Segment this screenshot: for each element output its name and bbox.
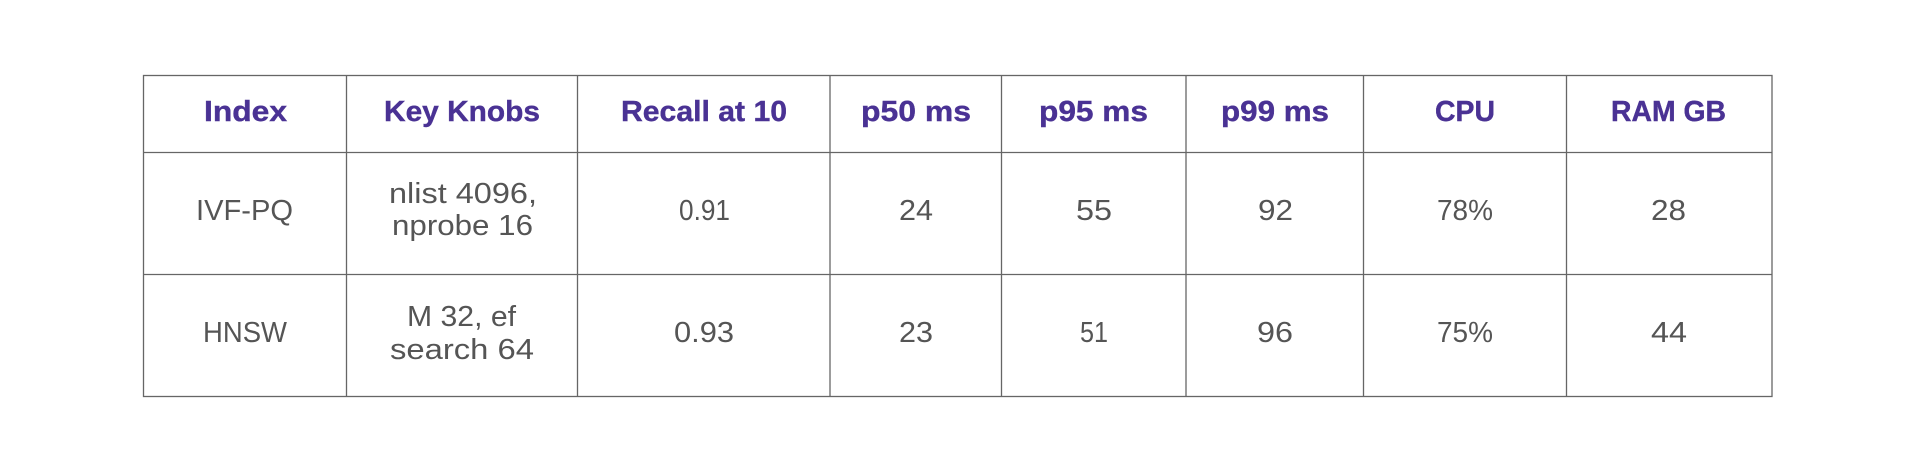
key knobs: nprobe 16 (392, 210, 533, 242)
header: Index: Index (204, 96, 287, 128)
header row (204, 96, 1726, 128)
key knobs (389, 178, 537, 242)
table grid (144, 76, 1772, 396)
key knobs: nlist 4096, (389, 178, 537, 210)
row: HNSW (203, 301, 1687, 366)
p95: 51 (1080, 317, 1108, 349)
row: IVF-PQ (196, 178, 1686, 242)
header: p95 ms: p95 ms (1039, 96, 1148, 128)
header: Key Knobs: Key Knobs (384, 96, 540, 128)
key knobs: M 32, ef (407, 301, 517, 333)
index name: IVF-PQ (196, 195, 293, 227)
RAM: 28 (1651, 195, 1686, 227)
index name: HNSW (203, 317, 288, 349)
recall: 0.91 (679, 195, 730, 227)
header: p50 ms: p50 ms (861, 96, 971, 128)
CPU: 75% (1437, 317, 1493, 349)
key knobs (390, 301, 534, 366)
recall: 0.93 (674, 317, 734, 349)
header: Recall at 10: Recall at 10 (621, 96, 787, 128)
CPU: 78% (1437, 195, 1493, 227)
header: p99 ms: p99 ms (1221, 96, 1329, 128)
header: RAM GB: RAM GB (1611, 96, 1726, 128)
p99: 96 (1257, 317, 1293, 349)
p50: 23 (899, 317, 933, 349)
header: CPU: CPU (1435, 96, 1495, 128)
p99: 92 (1258, 195, 1293, 227)
RAM: 44 (1651, 317, 1687, 349)
key knobs: search 64 (390, 334, 534, 366)
p95: 55 (1076, 195, 1112, 227)
p50: 24 (899, 195, 933, 227)
